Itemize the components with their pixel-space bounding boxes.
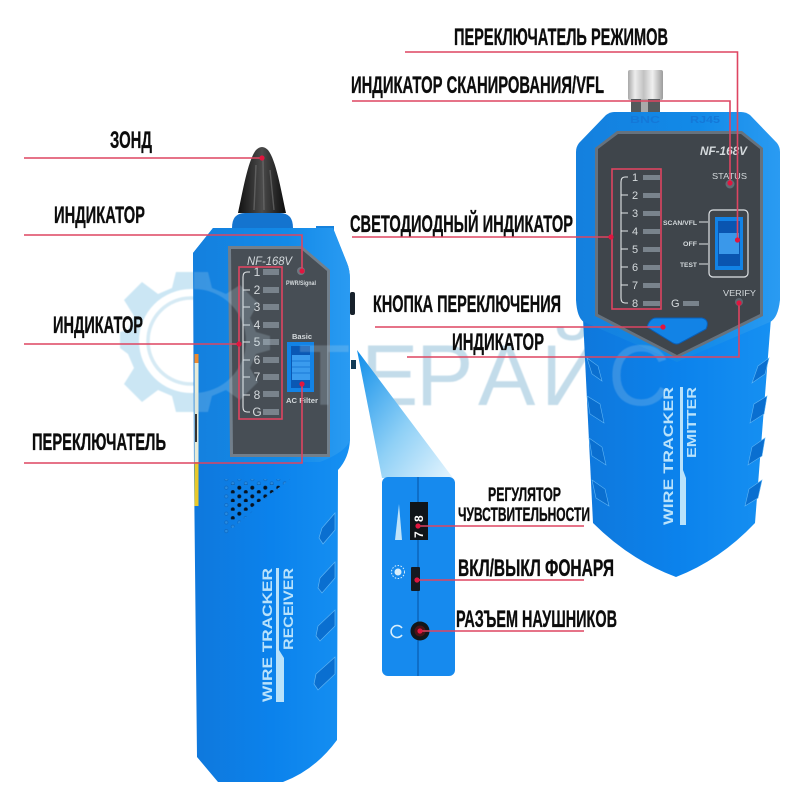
- leader: [417, 579, 584, 581]
- channel numbers: 5: [254, 335, 261, 349]
- side grips: [314, 513, 335, 690]
- dot: [414, 577, 420, 583]
- emitter upper shell: [576, 112, 780, 362]
- label: ЧУВСТВИТЕЛЬНОСТИ: [458, 505, 590, 526]
- emitter text: EMITTER: [684, 386, 699, 458]
- leader: [405, 52, 738, 240]
- callout: фонарь: [414, 555, 614, 583]
- receiver body: [193, 228, 350, 782]
- side tab: [316, 226, 334, 240]
- channel numbers: 8: [254, 388, 261, 402]
- leader: [24, 157, 262, 159]
- dot: [259, 155, 265, 161]
- speaker grille: [224, 479, 290, 536]
- set button: [647, 318, 707, 344]
- mode labels: [663, 220, 697, 269]
- model: NF-168V: [700, 146, 748, 158]
- lamp icon: [392, 566, 404, 578]
- receiver stripe: [276, 568, 284, 702]
- label: ИНДИКАТОР: [53, 312, 143, 339]
- callout: индикатор каналов: [24, 267, 282, 419]
- dot: [727, 180, 733, 186]
- channel bars: [643, 175, 699, 306]
- port labels: BNC: [630, 115, 660, 126]
- callout: verify: [407, 300, 742, 357]
- callout: сканирование: [351, 72, 733, 186]
- dot: [736, 300, 742, 306]
- label: РАЗЪЕМ НАУШНИКОВ: [456, 606, 617, 633]
- bracket: [243, 272, 250, 412]
- callout: светодиодный индикатор: [350, 169, 661, 309]
- channel numbers: 5: [632, 244, 638, 256]
- sticker accents: [194, 354, 198, 506]
- dot: [299, 268, 305, 274]
- channel numbers: 3: [254, 300, 261, 314]
- device: emitter: [576, 70, 780, 577]
- probe collar: [232, 213, 293, 228]
- sensitivity icon: [395, 504, 402, 540]
- switch: [709, 210, 748, 277]
- leader: [407, 303, 739, 357]
- label: ИНДИКАТОР СКАНИРОВАНИЯ/VFL: [351, 72, 604, 99]
- mode ticks: [699, 222, 708, 264]
- dot: [735, 237, 740, 243]
- probe: [238, 147, 286, 213]
- channel numbers: 4: [632, 226, 638, 238]
- channel numbers: 4: [254, 318, 261, 332]
- leader: [24, 343, 239, 345]
- channel numbers: 8: [632, 298, 638, 310]
- switch label top: Basic: [292, 332, 312, 341]
- callout: зонд: [24, 127, 265, 161]
- label: ПЕРЕКЛЮЧАТЕЛЬ: [32, 429, 166, 456]
- label: ИНДИКАТОР: [54, 202, 145, 229]
- leader: [24, 384, 302, 463]
- upper shell shade: [193, 228, 350, 462]
- dot: [299, 381, 305, 387]
- sensitivity wheel: [410, 502, 428, 540]
- device: receiver: [193, 147, 356, 782]
- switch label bottom: AC Filter: [286, 396, 318, 405]
- slider: [287, 342, 314, 392]
- channel numbers: G: [252, 405, 262, 419]
- led label: PWR/Signal: [286, 281, 316, 287]
- status label: STATUS: [712, 171, 747, 181]
- mode labels: SCAN/VFL: [663, 220, 697, 227]
- mode labels: TEST: [680, 262, 697, 269]
- inset panel: side controls: [382, 477, 455, 676]
- callout: наушники: [417, 606, 617, 634]
- verify led: [735, 298, 743, 306]
- led: [297, 267, 305, 275]
- label: ПЕРЕКЛЮЧАТЕЛЬ РЕЖИМОВ: [454, 24, 668, 51]
- channel numbers: 6: [254, 353, 261, 367]
- dot: [415, 523, 421, 529]
- callout: кнопка: [373, 291, 666, 330]
- mode labels: OFF: [683, 241, 697, 248]
- port labels: [630, 115, 721, 126]
- channel numbers: 1: [254, 265, 261, 279]
- bracket: [621, 177, 628, 303]
- model: NF-168V: [247, 256, 293, 268]
- leader: [352, 101, 730, 183]
- side wheel: [350, 292, 355, 315]
- box: [239, 267, 282, 419]
- channel numbers: 1: [632, 172, 638, 184]
- verify label: VERIFY: [723, 288, 756, 298]
- sensitivity wheel: 7: [412, 531, 426, 538]
- channel numbers: 7: [254, 370, 261, 384]
- channel numbers: 3: [632, 208, 638, 220]
- box: [612, 169, 661, 309]
- G label: G: [671, 298, 680, 310]
- receiver text: RECEIVER: [281, 568, 296, 650]
- emitter panel: [595, 131, 763, 358]
- callout: чувствительность: [415, 485, 590, 529]
- channel bars: [263, 269, 279, 415]
- channel numbers: 7: [632, 280, 638, 292]
- overlay letters: ТС: [298, 328, 670, 424]
- channel numbers: 2: [254, 283, 261, 297]
- leader: [352, 236, 612, 238]
- watermark: text: ЕРАЙ: [361, 327, 603, 424]
- leader: [418, 525, 584, 527]
- dot: [417, 628, 423, 634]
- channel numbers: 6: [632, 262, 638, 274]
- wire tracker text: WIRE TRACKER: [661, 387, 676, 525]
- watermark overlay on devices: [194, 272, 670, 424]
- callout: индикатор питания: [24, 202, 305, 274]
- lamp switch: [411, 567, 420, 591]
- leader: [375, 326, 663, 328]
- label: [458, 485, 590, 526]
- channel numbers: 2: [632, 190, 638, 202]
- label: ИНДИКАТОР: [452, 329, 544, 356]
- sensitivity wheel: 8: [412, 515, 426, 522]
- label: ЗОНД: [110, 127, 152, 154]
- label: КНОПКА ПЕРЕКЛЮЧЕНИЯ: [373, 291, 561, 318]
- channel numbers: [632, 172, 638, 310]
- port labels: RJ45: [690, 115, 721, 126]
- zoom wedge: [357, 350, 453, 478]
- wire tracker text: WIRE TRACKER: [260, 568, 275, 702]
- emitter grips: [587, 358, 769, 506]
- channel numbers: [252, 265, 262, 419]
- sticker: [194, 354, 198, 462]
- callout: режимы: [405, 24, 740, 243]
- dot: [608, 234, 614, 240]
- watermark: gear: [120, 272, 270, 412]
- BNC connector: [628, 70, 663, 114]
- side switch: [351, 360, 356, 369]
- gear overlay: [194, 272, 270, 412]
- emitter lower body: [583, 318, 771, 577]
- dot: [660, 324, 666, 330]
- status led: [726, 180, 734, 188]
- callout: переключатель: [24, 381, 305, 463]
- headphone icon: [391, 626, 402, 638]
- headphone jack: [410, 622, 430, 640]
- emitter stripe: [680, 387, 686, 525]
- leader: [24, 235, 302, 271]
- label: ВКЛ/ВЫКЛ ФОНАРЯ: [458, 555, 614, 582]
- dot: [236, 341, 242, 347]
- panel: [228, 246, 330, 457]
- leader: [420, 630, 584, 632]
- label: РЕГУЛЯТОР: [488, 485, 561, 506]
- label: СВЕТОДИОДНЫЙ ИНДИКАТОР: [350, 210, 573, 238]
